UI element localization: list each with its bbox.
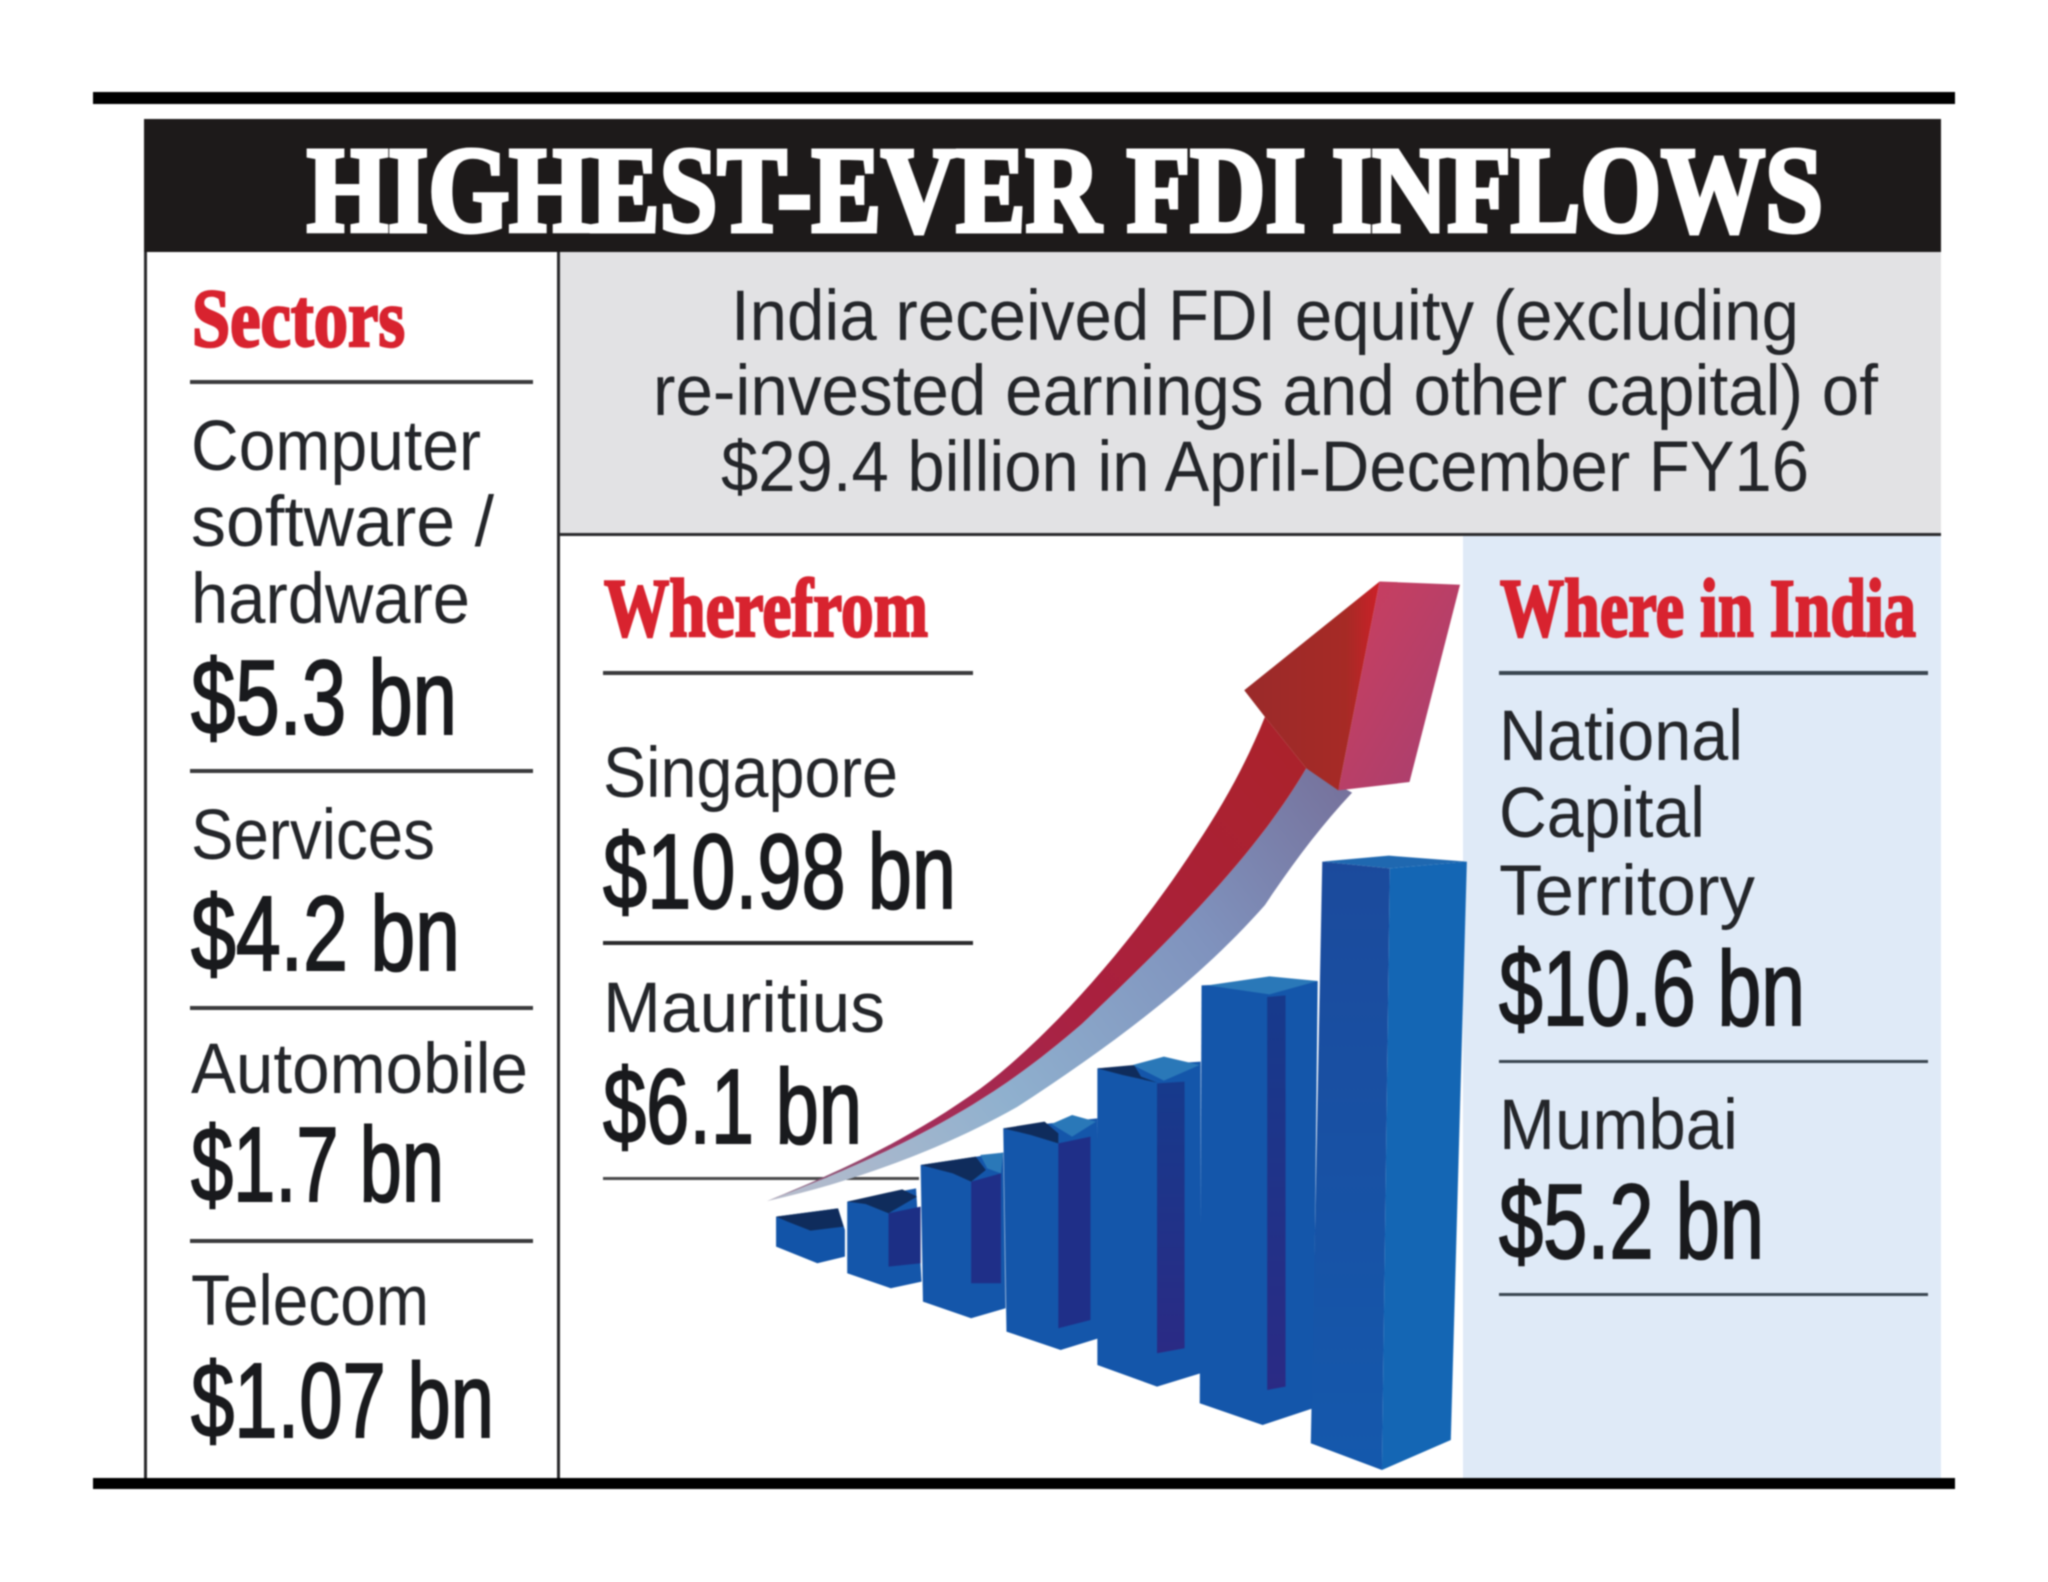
region: Mumbai — [1499, 1086, 1764, 1281]
source: Mauritius — [603, 969, 885, 1166]
panel: where in India — [1499, 562, 1928, 1296]
bar 2 — [847, 1188, 922, 1288]
heading: sectors: Sectors — [192, 272, 405, 364]
source: Mauritius: Mauritius — [603, 969, 885, 1048]
panel frame lines — [144, 252, 1941, 1478]
bar 7 — [1311, 856, 1467, 1470]
title: HIGHEST-EVER FDI INFLOWS — [307, 123, 1823, 258]
region: National Capital Territory: National — [1499, 697, 1743, 776]
title banner — [144, 119, 1941, 258]
region: Mumbai: Mumbai — [1499, 1086, 1738, 1165]
region: National Capital Territory — [1499, 697, 1805, 1048]
source: Mauritius: $6.1 bn — [603, 1048, 862, 1166]
sector: computer software / hardware: software / — [191, 483, 494, 562]
arrow underside — [767, 768, 1352, 1201]
sector: automobile — [191, 1030, 528, 1224]
bar 6 — [1200, 976, 1318, 1425]
sector: services — [191, 796, 460, 993]
summary text: $29.4 billion in April-December FY16 — [721, 428, 1809, 507]
bar chart: rising blue bars — [776, 856, 1467, 1470]
sector: computer software / hardware: hardware — [191, 560, 470, 639]
summary text — [653, 277, 1878, 507]
sector: services: Services — [191, 796, 435, 875]
sector: services: $4.2 bn — [191, 875, 460, 993]
panel: wherefrom — [603, 562, 973, 1180]
arrow shaft — [767, 717, 1306, 1201]
sector: telecom: Telecom — [191, 1262, 429, 1341]
sector: automobile: $1.7 bn — [191, 1106, 444, 1224]
source: Singapore: $10.98 bn — [603, 813, 956, 931]
region: Mumbai: $5.2 bn — [1499, 1163, 1764, 1281]
arrow head: left face — [1244, 581, 1380, 790]
panel: where in India background — [1463, 536, 1941, 1478]
arrow head: right face — [1338, 581, 1460, 790]
heading: where in India: Where in India — [1500, 562, 1916, 654]
region: National Capital Territory: Territory — [1499, 852, 1755, 931]
bar 1 — [776, 1208, 845, 1263]
bottom rule — [93, 1478, 1955, 1489]
sector: computer software / hardware — [191, 407, 494, 757]
sector: computer software / hardware: $5.3 bn — [191, 639, 457, 757]
source: Singapore: Singapore — [603, 734, 898, 813]
panel: summary — [559, 252, 1941, 534]
sector: computer software / hardware: Computer — [191, 407, 481, 486]
sector: automobile: Automobile — [191, 1030, 528, 1109]
heading: wherefrom: Wherefrom — [604, 562, 928, 654]
top rule — [93, 92, 1955, 104]
bar 3 — [921, 1153, 1006, 1318]
region: National Capital Territory: Capital — [1499, 774, 1705, 853]
summary text: India received FDI equity (excluding — [731, 277, 1799, 356]
source: Singapore — [603, 734, 956, 931]
summary text: re-invested earnings and other capital) of — [653, 352, 1878, 431]
icon: rising arrow — [767, 581, 1460, 1201]
bar 5 — [1097, 1057, 1201, 1387]
sector: telecom: $1.07 bn — [191, 1342, 494, 1460]
region: National Capital Territory: $10.6 bn — [1499, 930, 1805, 1048]
panel: sectors — [190, 272, 533, 1460]
sector: telecom — [191, 1262, 494, 1460]
bar 4 — [1003, 1115, 1099, 1350]
